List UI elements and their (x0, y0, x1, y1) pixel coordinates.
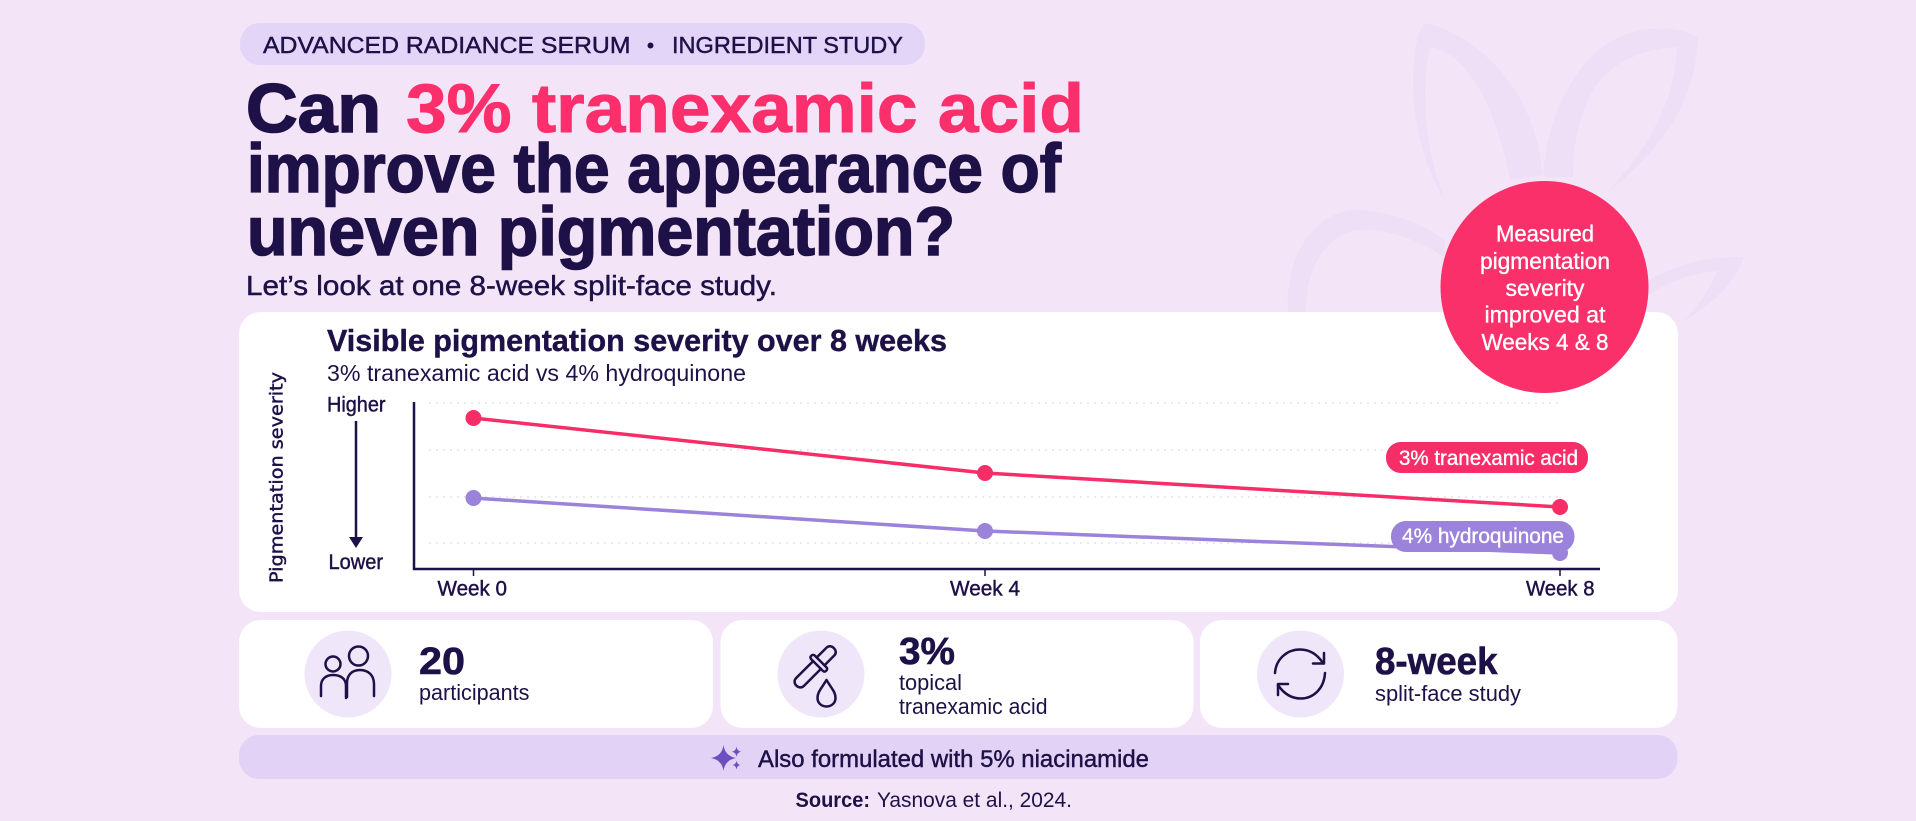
stat: 20 participants: 20 (419, 641, 465, 683)
source note: Source: (796, 789, 870, 812)
eyebrow pill: ADVANCED RADIANCE SERUM (263, 32, 630, 58)
series label: 4% hydroquinone: 4% hydroquinone (1402, 524, 1564, 548)
subtitle: Let’s look at one 8-week split-face study. (246, 270, 777, 301)
series: 3% tranexamic acid (466, 410, 1568, 515)
callout: red circle: Weeks 4 & 8 (1482, 329, 1608, 355)
stat: 3% topical tranexamic acid: topical (899, 670, 962, 695)
series: 4% hydroquinone (466, 490, 1568, 561)
title: uneven pigmentation? (247, 193, 955, 270)
y-axis title: Pigmentation severity (266, 372, 288, 583)
callout: red circle: severity (1506, 275, 1585, 301)
chart axes (414, 402, 1600, 576)
eyebrow pill (240, 23, 925, 65)
stat: 20 participants (419, 641, 530, 705)
callout: red circle: pigmentation (1480, 248, 1610, 274)
callout: red circle (1440, 181, 1648, 393)
title (246, 70, 1084, 270)
stat: 3% topical tranexamic acid (899, 631, 1048, 719)
title: improve the appearance of (247, 130, 1062, 207)
banner: niacinamide: Also formulated with 5% niacinamide (758, 746, 1149, 773)
eyebrow pill: INGREDIENT STUDY (672, 32, 903, 58)
panel: line chart card (239, 312, 1678, 612)
source note: Yasnova et al., 2024. (877, 789, 1072, 812)
icon: dropper (778, 630, 864, 718)
stat: 8-week split-face study (1375, 641, 1521, 706)
stat: 8-week split-face study: split-face study (1375, 681, 1521, 706)
callout: red circle: Measured (1496, 220, 1594, 246)
x-axis labels: Week 4 (950, 578, 1020, 600)
stat: 20 participants: participants (419, 680, 530, 705)
stat: 8-week split-face study: 8-week (1375, 641, 1498, 683)
callout: red circle: improved at (1484, 302, 1606, 328)
label: lower: Lower (328, 551, 383, 574)
stat: 3% topical tranexamic acid: tranexamic acid (899, 694, 1048, 719)
chart subtitle: 3% tranexamic acid vs 4% hydroquinone (327, 360, 746, 386)
panel: duration stat (1200, 620, 1678, 728)
x-axis labels: Week 0 (438, 578, 507, 600)
title: Can (246, 70, 381, 147)
panel: participants stat (239, 620, 713, 728)
background watermark: bunny outline (1288, 24, 1744, 322)
icon: people (304, 630, 392, 718)
arrow: higher to lower (349, 421, 363, 548)
x-axis labels: Week 8 (1526, 578, 1594, 600)
chart title: Visible pigmentation severity over 8 weeks (327, 323, 947, 358)
stat: 3% topical tranexamic acid: 3% (899, 631, 955, 673)
title: 3% tranexamic acid (406, 70, 1084, 147)
x-axis labels (438, 578, 1594, 600)
icon: cycle arrows (1257, 630, 1344, 718)
icon: sparkles (711, 745, 741, 771)
label: higher: Higher (327, 394, 386, 416)
series label: 3% tranexamic acid: 3% tranexamic acid (1399, 446, 1578, 470)
banner: niacinamide (239, 735, 1678, 779)
panel: concentration stat (720, 620, 1194, 728)
